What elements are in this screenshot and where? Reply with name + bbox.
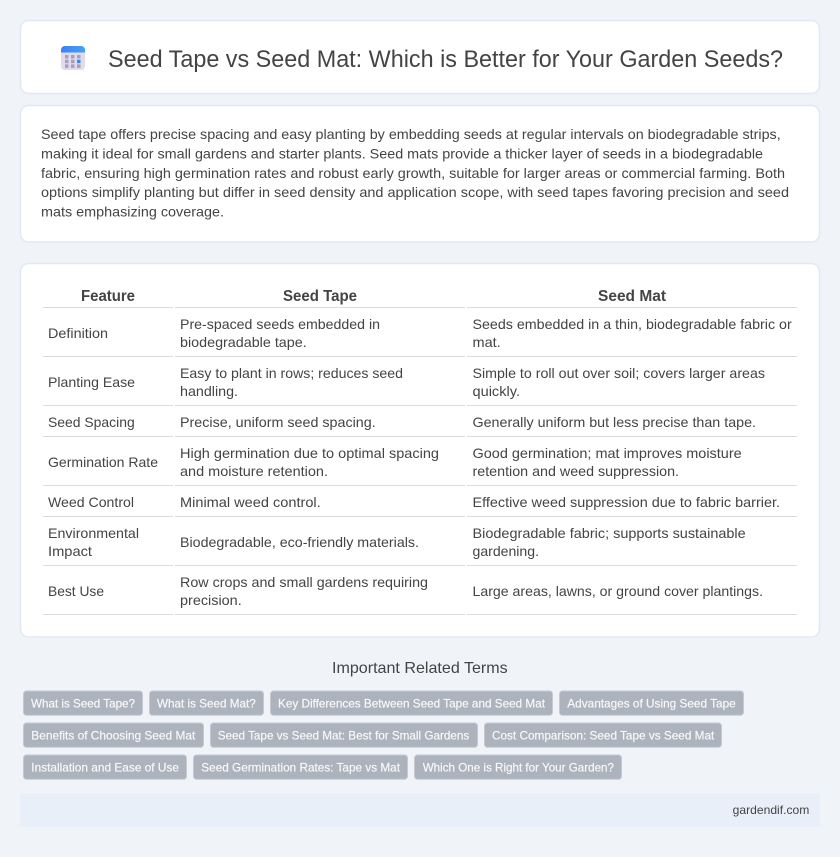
footer bar [20, 793, 820, 827]
table row: Planting Ease: Simple to roll out over soil; covers larger areas [472, 365, 765, 381]
table row: Planting Ease: quickly. [472, 383, 520, 399]
table row: Weed Control: Weed Control [48, 494, 134, 510]
table row: Environmental Impact: Environmental [48, 525, 139, 541]
text block: summary paragraph: options simplify planting but differ in seed density and application scope, with seed tapes favoring precision and seed [41, 184, 789, 200]
table row: Definition: biodegradable tape. [180, 334, 307, 350]
table row: Seed Spacing: Generally uniform but less precise than tape. [472, 414, 756, 430]
tag: Key Differences Between Seed Tape and Seed Mat [278, 696, 546, 710]
text block: summary paragraph: fabric, ensuring high germination rates and robust early growth, suitable for larger areas or commercial farming. Both [41, 165, 785, 181]
table row: Planting Ease: Easy to plant in rows; reduces seed [180, 365, 403, 381]
tag [270, 691, 552, 715]
tag: Installation and Ease of Use [31, 760, 179, 774]
table row: Best Use: Row crops and small gardens requiring [180, 574, 428, 590]
table row: Environmental Impact: Biodegradable, eco-friendly materials. [180, 534, 419, 550]
table row: Best Use [43, 574, 797, 615]
table row: Germination Rate: and moisture retention. [180, 463, 328, 479]
table row: Best Use: Large areas, lawns, or ground cover plantings. [472, 583, 763, 599]
table row: Germination Rate: retention and weed suppression. [472, 463, 679, 479]
table row: Environmental Impact: Impact [48, 543, 92, 559]
tag [560, 691, 744, 715]
related terms tags [24, 691, 744, 779]
table row: Definition: Pre-spaced seeds embedded in [180, 316, 380, 332]
table row: Seed Spacing: Precise, uniform seed spacing. [180, 414, 376, 430]
tag [194, 755, 408, 779]
panel: summary [20, 106, 820, 242]
tag: Which One is Right for Your Garden? [423, 760, 614, 774]
table row: Seed Spacing [43, 414, 797, 437]
icon: calendar [61, 46, 85, 70]
table header row [43, 288, 797, 308]
tag: Benefits of Choosing Seed Mat [31, 728, 196, 742]
table header row: Feature [81, 288, 135, 305]
table row: Weed Control: Minimal weed control. [180, 494, 321, 510]
tag [484, 723, 722, 747]
table row: Definition: mat. [472, 334, 501, 350]
table row: Germination Rate: High germination due to optimal spacing [180, 445, 439, 461]
table row: Germination Rate: Good germination; mat improves moisture [472, 445, 742, 461]
tag [24, 723, 204, 747]
text block: summary paragraph: mats emphasizing coverage. [41, 204, 224, 220]
table row: Definition: Definition [48, 325, 108, 341]
footer source: gardendif.com [733, 803, 809, 817]
table row: Germination Rate: Germination Rate [48, 454, 158, 470]
table row: Weed Control: Effective weed suppression due to fabric barrier. [472, 494, 780, 510]
table row: Definition [43, 316, 797, 357]
tag: What is Seed Mat? [157, 696, 256, 710]
table row: Weed Control [43, 494, 797, 517]
table row: Germination Rate [43, 445, 797, 486]
panel: title header [20, 20, 820, 94]
tag: What is Seed Tape? [31, 696, 135, 710]
tag: Cost Comparison: Seed Tape vs Seed Mat [492, 728, 715, 742]
tag [24, 691, 142, 715]
tag [414, 755, 622, 779]
heading: related terms: Important Related Terms [332, 660, 508, 677]
table row: Planting Ease [43, 365, 797, 406]
tag [150, 691, 264, 715]
tag [210, 723, 478, 747]
title: Seed Tape vs Seed Mat: Which is Better for Your Garden Seeds? [108, 46, 783, 73]
table row: Best Use: precision. [180, 592, 242, 608]
text block: summary paragraph: Seed tape offers precise spacing and easy planting by embedding seeds at regular intervals on biodegradable strips, [41, 126, 781, 142]
table row: Environmental Impact [43, 525, 797, 566]
tag: Seed Germination Rates: Tape vs Mat [201, 760, 401, 774]
table row: Seed Spacing: Seed Spacing [48, 414, 135, 430]
panel: comparison table [20, 264, 820, 637]
text block: summary paragraph: making it ideal for small gardens and starter plants. Seed mats provide a thicker layer of seeds in a biodegradable [41, 146, 763, 162]
table header row: Seed Mat [598, 288, 667, 305]
table row: Definition: Seeds embedded in a thin, biodegradable fabric or [472, 316, 792, 332]
tag: Seed Tape vs Seed Mat: Best for Small Gardens [218, 728, 469, 742]
table header row: Seed Tape [283, 288, 357, 305]
tag [24, 755, 186, 779]
table row: Environmental Impact: gardening. [472, 543, 539, 559]
text block: summary paragraph [41, 126, 789, 220]
table row: Environmental Impact: Biodegradable fabric; supports sustainable [472, 525, 746, 541]
table row: Planting Ease: Planting Ease [48, 374, 135, 390]
table row: Best Use: Best Use [48, 583, 104, 599]
tag: Advantages of Using Seed Tape [567, 696, 736, 710]
table row: Planting Ease: handling. [180, 383, 238, 399]
